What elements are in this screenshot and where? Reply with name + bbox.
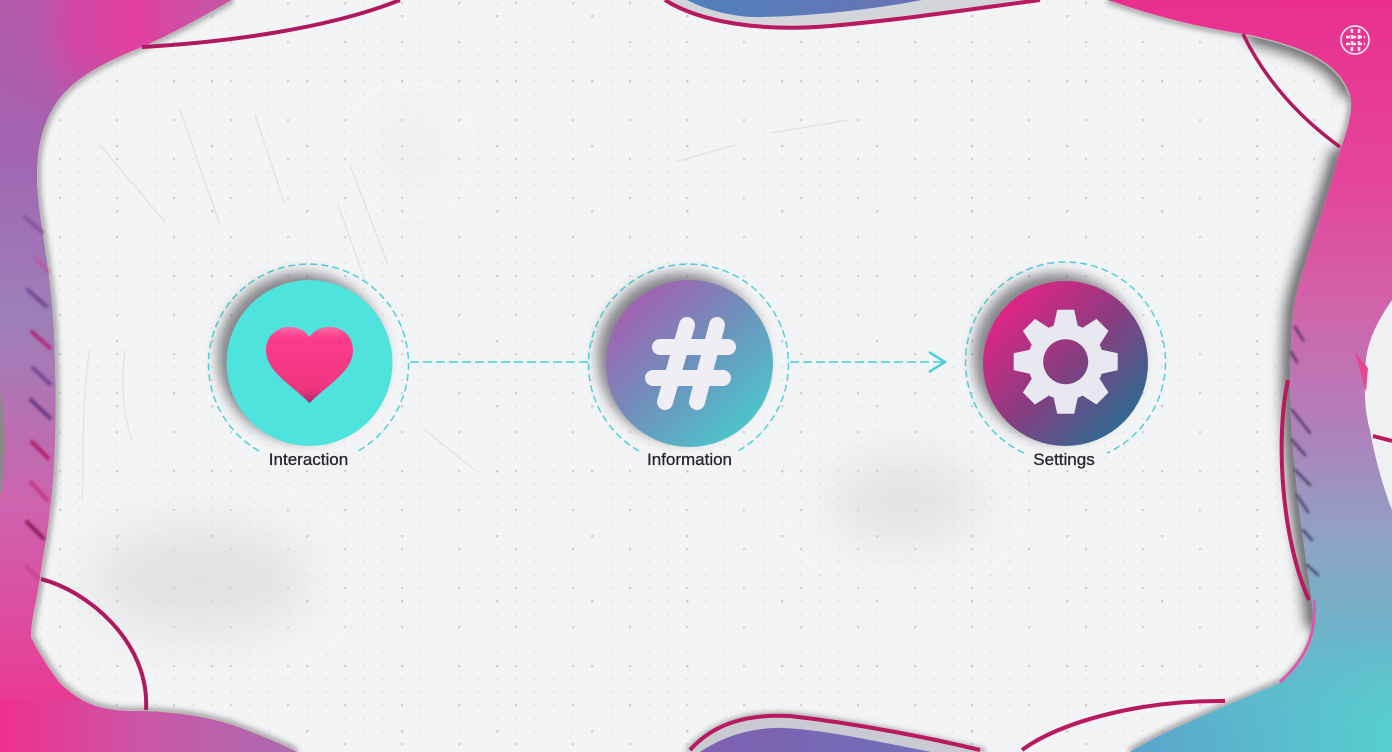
gradient disc bbox=[606, 280, 773, 447]
icon: gear bbox=[1014, 310, 1118, 414]
label: Interaction bbox=[269, 450, 348, 469]
faint scratches bbox=[82, 110, 850, 500]
gradient disc bbox=[983, 281, 1148, 446]
crescent shadow bbox=[974, 273, 1142, 441]
grey smudges bbox=[95, 456, 971, 640]
right feather ticks bbox=[1291, 327, 1318, 575]
magenta curve: bottom left bbox=[41, 579, 146, 710]
connector: interaction to information bbox=[410, 361, 590, 363]
dashed ring bbox=[966, 262, 1166, 453]
magenta curve: top right bbox=[1243, 34, 1340, 147]
heavier shadow on right edge bbox=[1250, 35, 1350, 628]
magenta curve: bottom right bbox=[1022, 701, 1225, 750]
node: settings bbox=[966, 262, 1166, 469]
dashed ring bbox=[588, 264, 788, 451]
top centre blob bbox=[662, 0, 1040, 28]
node: information bbox=[588, 264, 788, 469]
connector arrow: information to settings bbox=[790, 352, 945, 372]
left feather ticks bbox=[25, 217, 50, 578]
right inner white cut-out bbox=[1355, 300, 1392, 510]
magenta curve: right side bbox=[1282, 380, 1309, 600]
label: Information bbox=[647, 450, 732, 469]
crescent shadow bbox=[218, 273, 386, 441]
crescent shadow bbox=[598, 273, 766, 441]
dashed ring bbox=[209, 264, 409, 451]
node: interaction bbox=[209, 264, 409, 469]
icon: hash bbox=[653, 325, 728, 402]
magenta edge: lower right bbox=[1280, 600, 1314, 682]
magenta curve: bottom centre bbox=[690, 716, 980, 750]
icon: heart bbox=[266, 327, 353, 403]
teal disc bbox=[226, 280, 392, 446]
magenta curve: top centre bbox=[665, 0, 1040, 28]
top-right logo badge bbox=[1341, 26, 1369, 54]
magenta curve: top left bbox=[142, 0, 400, 47]
label: Settings bbox=[1033, 450, 1095, 469]
